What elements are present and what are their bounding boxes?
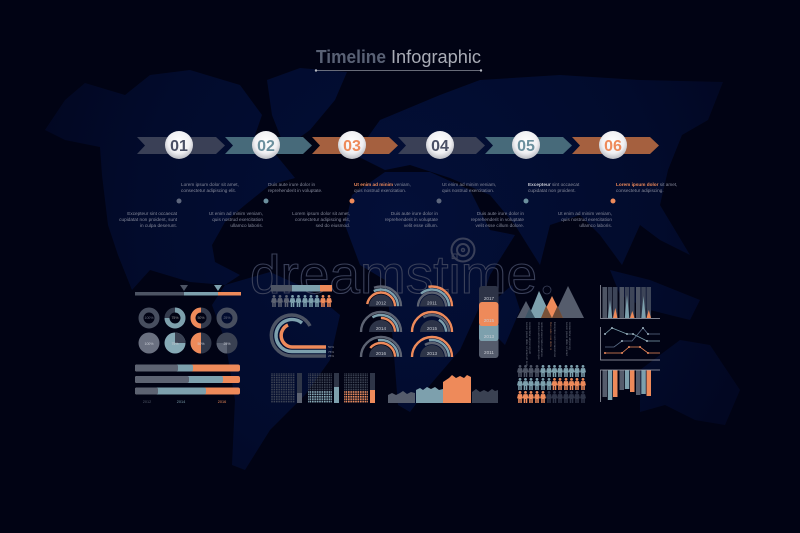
- title: Timeline: [316, 47, 386, 67]
- step 03: sed do eiusmod.: [316, 223, 350, 228]
- slider bar: [135, 285, 241, 296]
- step 06: quis nostrud exercitation: [561, 217, 612, 222]
- step 05: 05: [517, 138, 535, 155]
- rotated labels: Lorem ipsum dolor sit amet: [565, 322, 569, 356]
- donut charts: [141, 310, 235, 326]
- world map: [45, 68, 740, 470]
- concentric arc gauge: [271, 315, 334, 358]
- half-circle gauges: 2014: [376, 326, 387, 331]
- rotated labels: Duis aute irure dolor in: [549, 322, 553, 351]
- step 06: consectetur adipiscing.: [616, 188, 664, 193]
- half-circle gauges: 2015: [427, 326, 438, 331]
- pie charts: 25%: [223, 316, 231, 320]
- pie charts: [138, 316, 238, 354]
- stacked bars: 2014: [177, 400, 185, 404]
- pie charts: 50%: [197, 316, 205, 320]
- mountain chart: [517, 286, 584, 318]
- step 03: [292, 131, 411, 228]
- step 01: 01: [170, 138, 188, 155]
- step 03: consectetur adipiscing elit,: [295, 217, 350, 222]
- stacked bars: 2016: [218, 400, 226, 404]
- area chart: [388, 375, 498, 403]
- step 02: reprehenderit in voluptate.: [268, 188, 322, 193]
- stacked bars: [135, 364, 240, 404]
- step 06: 06: [604, 138, 622, 155]
- step 05: cupidatat non proident.: [528, 188, 576, 193]
- stacked bars: 2012: [143, 400, 151, 404]
- step 04: 04: [431, 138, 449, 155]
- step 05: [471, 131, 580, 228]
- rotated labels: [525, 322, 572, 366]
- step 06: [558, 131, 677, 228]
- pie charts: 100%: [145, 342, 153, 346]
- rotated labels: consectetur adipiscing elit: [528, 322, 532, 354]
- step 04: Duis aute irure dolor in: [391, 211, 438, 216]
- step 02: ullamco laboris.: [230, 223, 263, 228]
- concentric arc gauge: 50%: [328, 345, 334, 349]
- people grid: [517, 365, 586, 403]
- pie charts: 25%: [223, 342, 231, 346]
- people bar: [271, 285, 332, 307]
- pie charts: 75%: [171, 316, 179, 320]
- step 01: cupidatat non proident, sunt: [119, 217, 178, 222]
- step 02: 02: [257, 138, 275, 155]
- cylinder stack: 2013: [484, 334, 495, 339]
- rotated labels: consectetur adipiscing: [568, 322, 572, 350]
- step 04: quis nostrud exercitation.: [442, 188, 494, 193]
- timeline arrows: [137, 137, 659, 154]
- pie charts: 75%: [171, 342, 179, 346]
- half-circle gauges: 2013: [427, 351, 438, 356]
- step 02: [209, 131, 322, 228]
- step 06: ullamco laboris.: [579, 223, 612, 228]
- cylinder stack: 2011: [484, 350, 494, 355]
- step 03: Ut enim ad minim veniam,: [354, 182, 411, 187]
- watermark: dreamstime: [250, 245, 537, 305]
- step 04: reprehenderit in voluptate: [385, 217, 438, 222]
- cylinder stack: 2017: [484, 296, 495, 301]
- half-circle gauges: [361, 286, 452, 357]
- step 02: Duis aute irure dolor in: [268, 182, 316, 187]
- half-circle gauges: 2011: [427, 300, 437, 306]
- title: [315, 47, 482, 72]
- step 02: Ut enim ad minim veniam,: [209, 211, 263, 216]
- step 05: Duis aute irure dolor in: [477, 211, 524, 216]
- step 06: Lorem ipsum dolor sit amet,: [616, 182, 677, 187]
- dot grid charts: [271, 373, 375, 403]
- pie charts: 50%: [197, 342, 205, 346]
- rotated labels: nostrud exercitation ullamco: [540, 322, 544, 357]
- concentric arc gauge: 25%: [328, 354, 334, 358]
- title: Infographic: [391, 47, 481, 67]
- rotated labels: Ut enim ad minim veniam quis: [537, 322, 541, 360]
- step 05: Excepteur sint occaecat: [528, 182, 580, 187]
- concentric arc gauge: 75%: [328, 350, 334, 354]
- cylinder stack: [479, 286, 498, 358]
- half-circle gauges: 2016: [376, 351, 387, 356]
- step 01: [119, 131, 239, 228]
- pie charts: 100%: [145, 316, 153, 320]
- cylinder stack: 2015: [484, 318, 495, 323]
- step 06: Ut enim ad minim veniam,: [558, 211, 612, 216]
- spike bar chart: [600, 285, 660, 318]
- step 01: Excepteur sint occaecat: [127, 211, 178, 216]
- step 03: 03: [343, 138, 361, 155]
- half-circle gauges: 2012: [376, 300, 387, 306]
- line chart: [600, 327, 660, 360]
- step 01: in culpa deserunt.: [140, 223, 177, 228]
- step 01: consectetur adipiscing elit.: [181, 188, 236, 193]
- step 04: velit esse cillum.: [404, 223, 438, 228]
- hanging bar chart: [600, 370, 660, 402]
- step 03: Lorem ipsum dolor sit amet,: [292, 211, 350, 216]
- step 03: quis nostrud exercitation.: [354, 188, 406, 193]
- step 05: velit esse cillum dolore.: [476, 223, 524, 228]
- step 04: Ut enim ad minim veniam,: [442, 182, 496, 187]
- step 05: reprehenderit in voluptate: [471, 217, 524, 222]
- step 02: quis nostrud exercitation: [212, 217, 263, 222]
- step 04: [385, 131, 496, 228]
- rotated labels: Lorem ipsum dolor sit amet elit sed: [525, 322, 529, 366]
- rotated labels: Excepteur sint occaecat non: [553, 322, 557, 358]
- step 01: Lorem ipsum dolor sit amet,: [181, 182, 239, 187]
